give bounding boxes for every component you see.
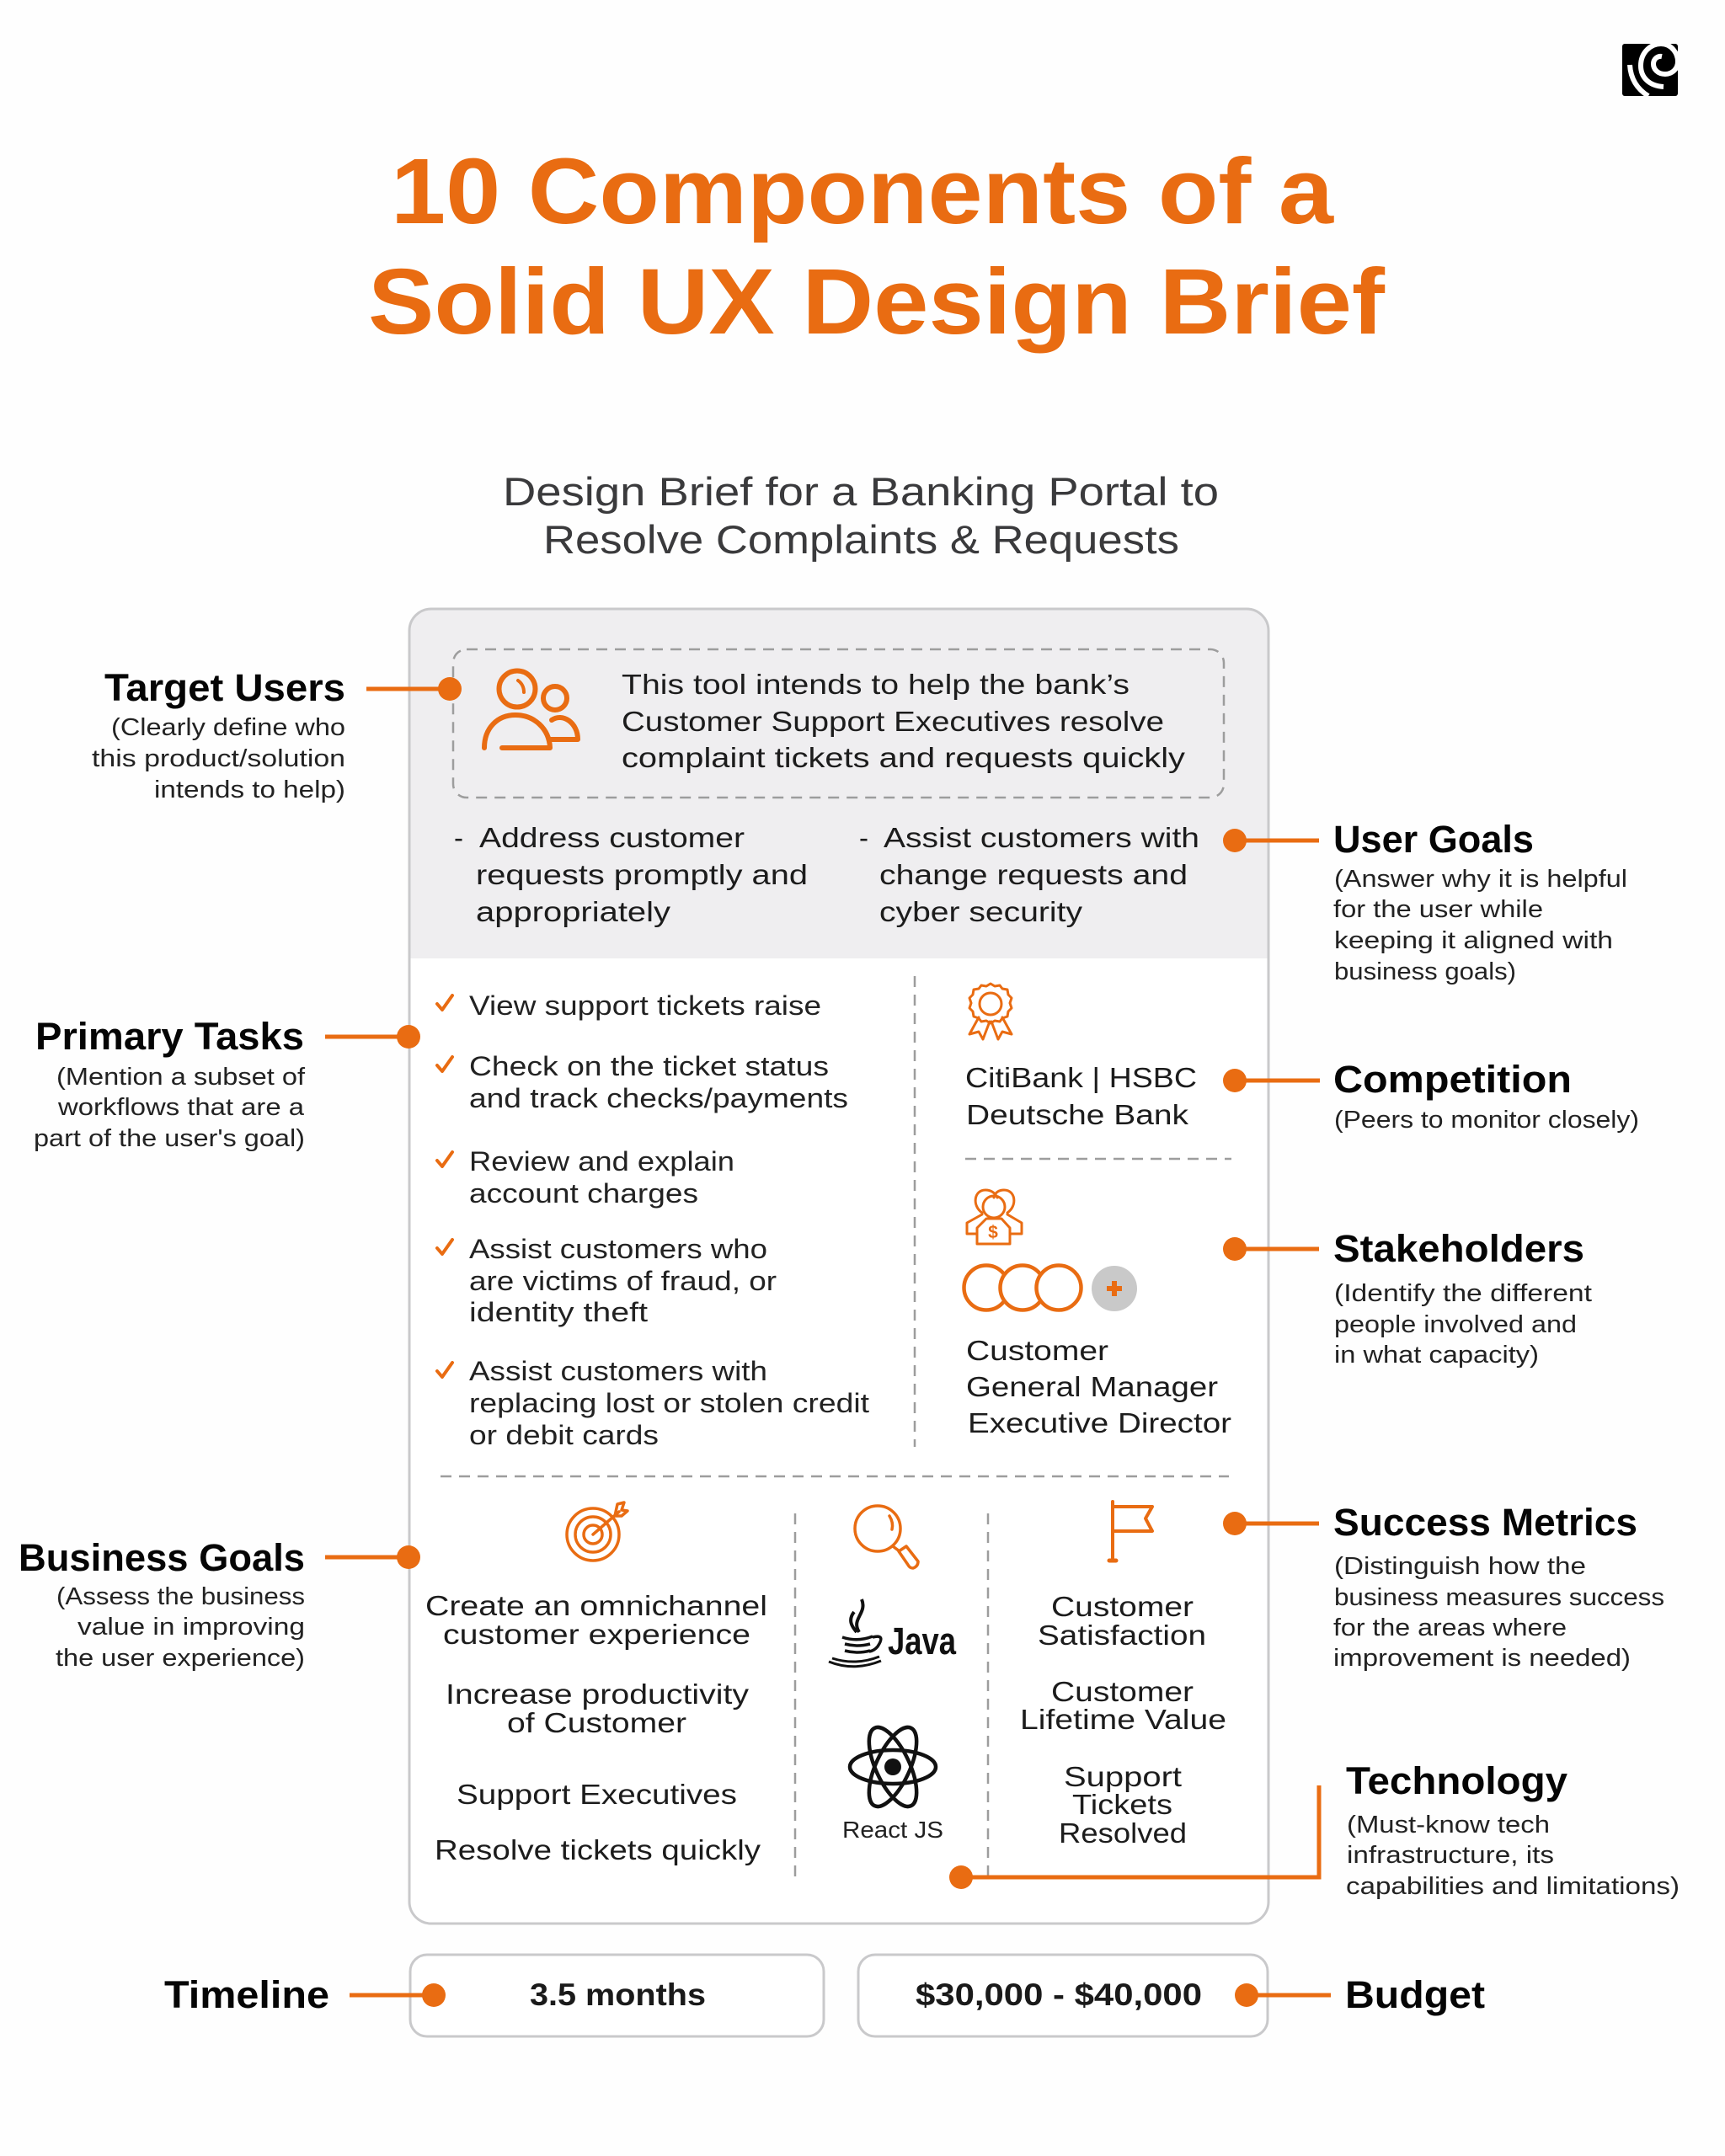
subtitle: Design Brief for a Banking Portal to bbox=[503, 469, 1219, 514]
logo bbox=[1622, 44, 1678, 96]
callout: user goals: (Answer why it is helpful bbox=[1334, 866, 1627, 893]
panel: timeline value bbox=[410, 1955, 824, 2036]
icon: stakeholders with dollar bbox=[967, 1190, 1022, 1244]
success metrics column bbox=[1020, 1502, 1226, 1849]
business goal text: customer experience bbox=[443, 1619, 750, 1650]
icon: magnifier bbox=[855, 1506, 918, 1568]
callout: target users: intends to help) bbox=[154, 776, 345, 803]
subtitle bbox=[503, 469, 1219, 562]
title bbox=[368, 140, 1385, 354]
title: 10 Components of a bbox=[391, 140, 1334, 243]
callout: user goals bbox=[1223, 818, 1627, 985]
success metric text: Support bbox=[1064, 1761, 1182, 1792]
callout: budget: Budget bbox=[1345, 1973, 1485, 2016]
user goal one: requests promptly and bbox=[476, 859, 808, 890]
callout: budget bbox=[1235, 1973, 1485, 2016]
callout: user goals: for the user while bbox=[1333, 896, 1543, 923]
primary tasks list: or debit cards bbox=[469, 1420, 659, 1450]
user goal one: Address customer bbox=[479, 822, 745, 853]
icon: flag bbox=[1109, 1502, 1152, 1561]
callout: primary tasks: (Mention a subset of bbox=[56, 1064, 306, 1091]
title: Solid UX Design Brief bbox=[368, 250, 1385, 354]
success metric text: Resolved bbox=[1059, 1817, 1187, 1849]
callout: technology bbox=[949, 1759, 1680, 1900]
success metric text: Customer bbox=[1051, 1591, 1194, 1622]
callout: success metrics bbox=[1223, 1501, 1664, 1672]
callout: primary tasks: workflows that are a bbox=[57, 1094, 305, 1121]
callout: success metrics: Success Metrics bbox=[1333, 1501, 1637, 1544]
primary tasks list: Review and explain bbox=[469, 1146, 734, 1177]
subtitle: Resolve Complaints & Requests bbox=[543, 517, 1179, 562]
callout: technology: Technology bbox=[1346, 1759, 1567, 1802]
callout: success metrics: business measures success bbox=[1334, 1584, 1664, 1611]
callout: business goals: the user experience) bbox=[56, 1645, 305, 1672]
callout: success metrics: (Distinguish how the bbox=[1334, 1553, 1586, 1580]
callout: primary tasks bbox=[34, 1015, 420, 1152]
callout: user goals: business goals) bbox=[1334, 958, 1516, 985]
primary tasks list: View support tickets raise bbox=[469, 990, 821, 1021]
competition names: Deutsche Bank bbox=[966, 1099, 1189, 1130]
target users statement: Customer Support Executives resolve bbox=[622, 706, 1164, 737]
user goal two bbox=[859, 822, 1199, 927]
callout: target users: Target Users bbox=[104, 666, 345, 709]
primary tasks list: and track checks/payments bbox=[469, 1083, 848, 1113]
target users box bbox=[453, 649, 1224, 798]
callout: timeline: Timeline bbox=[164, 1973, 329, 2016]
technology column bbox=[829, 1506, 957, 1843]
business goal text: Support Executives bbox=[457, 1779, 737, 1810]
stakeholder avatars bbox=[964, 1265, 1137, 1311]
icon: users bbox=[484, 670, 578, 748]
business goal text: Create an omnichannel bbox=[425, 1590, 767, 1621]
logo: java: Java bbox=[888, 1620, 957, 1662]
icon: stakeholders with dollar: $ bbox=[988, 1223, 998, 1242]
callout: timeline bbox=[164, 1973, 446, 2016]
callout: technology: (Must-know tech bbox=[1347, 1812, 1550, 1838]
target users statement: This tool intends to help the bank’s bbox=[622, 669, 1130, 700]
callout: competition bbox=[1223, 1058, 1639, 1134]
primary tasks list: Check on the ticket status bbox=[469, 1051, 829, 1081]
callout: technology: infrastructure, its bbox=[1347, 1842, 1554, 1869]
target users statement: complaint tickets and requests quickly bbox=[622, 742, 1186, 773]
callout: business goals: (Assess the business bbox=[56, 1583, 305, 1610]
stakeholder names: Customer bbox=[966, 1335, 1108, 1366]
user goal one: - bbox=[454, 822, 463, 853]
primary tasks list: are victims of fraud, or bbox=[469, 1266, 777, 1296]
competition names bbox=[965, 1062, 1197, 1130]
panel: budget value bbox=[858, 1955, 1268, 2036]
callout: stakeholders bbox=[1223, 1227, 1592, 1369]
panel: timeline value: 3.5 months bbox=[530, 1977, 706, 2012]
callout: target users bbox=[92, 666, 462, 803]
callout: primary tasks: Primary Tasks bbox=[35, 1015, 304, 1058]
stakeholder names: General Manager bbox=[966, 1371, 1218, 1402]
user goal two: change requests and bbox=[879, 859, 1188, 890]
callout: target users: this product/solution bbox=[92, 745, 345, 772]
callout: target users: (Clearly define who bbox=[111, 714, 345, 741]
business goal text: Resolve tickets quickly bbox=[435, 1834, 761, 1865]
success metric text bbox=[1020, 1591, 1226, 1849]
competition bbox=[965, 984, 1197, 1130]
callout: business goals bbox=[19, 1536, 420, 1672]
logo: java bbox=[829, 1599, 957, 1667]
callout: success metrics: for the areas where bbox=[1333, 1614, 1567, 1641]
success metric text: Tickets bbox=[1072, 1789, 1172, 1820]
callout: success metrics: improvement is needed) bbox=[1333, 1645, 1631, 1672]
callout: stakeholders: Stakeholders bbox=[1333, 1227, 1584, 1270]
check 5 bbox=[437, 1363, 452, 1377]
primary tasks list: identity theft bbox=[469, 1297, 648, 1327]
callout: stakeholders: (Identify the different bbox=[1334, 1280, 1592, 1307]
primary tasks list: Assist customers with bbox=[469, 1356, 767, 1386]
user goal one bbox=[454, 822, 808, 927]
logo: react bbox=[850, 1721, 936, 1813]
success metric text: Lifetime Value bbox=[1020, 1704, 1226, 1735]
callout: competition: Competition bbox=[1333, 1058, 1572, 1101]
react js label: React JS bbox=[842, 1817, 943, 1843]
callout: user goals: User Goals bbox=[1333, 818, 1534, 861]
panel: budget value: $30,000 - $40,000 bbox=[916, 1977, 1202, 2012]
panel: design brief card bbox=[409, 609, 1268, 1924]
user goal two: Assist customers with bbox=[884, 822, 1199, 853]
check 2 bbox=[437, 1057, 452, 1071]
stakeholder names: Executive Director bbox=[968, 1407, 1231, 1438]
business goal text: of Customer bbox=[507, 1707, 686, 1738]
business goals column bbox=[425, 1502, 767, 1865]
stakeholders bbox=[964, 1190, 1231, 1438]
business goal text bbox=[425, 1590, 767, 1865]
callout: business goals: Business Goals bbox=[19, 1536, 305, 1579]
stakeholder names bbox=[966, 1335, 1231, 1438]
callout: user goals: keeping it aligned with bbox=[1334, 927, 1613, 954]
callout: primary tasks: part of the user's goal) bbox=[34, 1125, 305, 1152]
callout: stakeholders: people involved and bbox=[1334, 1311, 1577, 1338]
primary tasks list bbox=[437, 990, 869, 1450]
business goal text: Increase productivity bbox=[446, 1678, 750, 1710]
callout: competition: (Peers to monitor closely) bbox=[1334, 1107, 1639, 1134]
success metric text: Satisfaction bbox=[1038, 1620, 1206, 1651]
user goal two: - bbox=[859, 822, 868, 853]
target users statement bbox=[622, 669, 1186, 773]
primary tasks list: Assist customers who bbox=[469, 1234, 767, 1264]
callout: technology: capabilities and limitations) bbox=[1346, 1873, 1680, 1900]
competition names: CitiBank | HSBC bbox=[965, 1062, 1197, 1093]
check 4 bbox=[437, 1240, 452, 1254]
icon: award ribbon bbox=[969, 984, 1012, 1039]
icon: target bbox=[567, 1502, 628, 1561]
callout: stakeholders: in what capacity) bbox=[1334, 1342, 1539, 1369]
user goal two: cyber security bbox=[879, 896, 1083, 927]
check 3 bbox=[437, 1152, 452, 1166]
user goal one: appropriately bbox=[476, 896, 671, 927]
success metric text: Customer bbox=[1051, 1676, 1194, 1707]
primary tasks list: account charges bbox=[469, 1178, 698, 1209]
primary tasks list: replacing lost or stolen credit bbox=[469, 1388, 869, 1418]
callout: business goals: value in improving bbox=[77, 1614, 305, 1641]
check 1 bbox=[437, 995, 452, 1010]
